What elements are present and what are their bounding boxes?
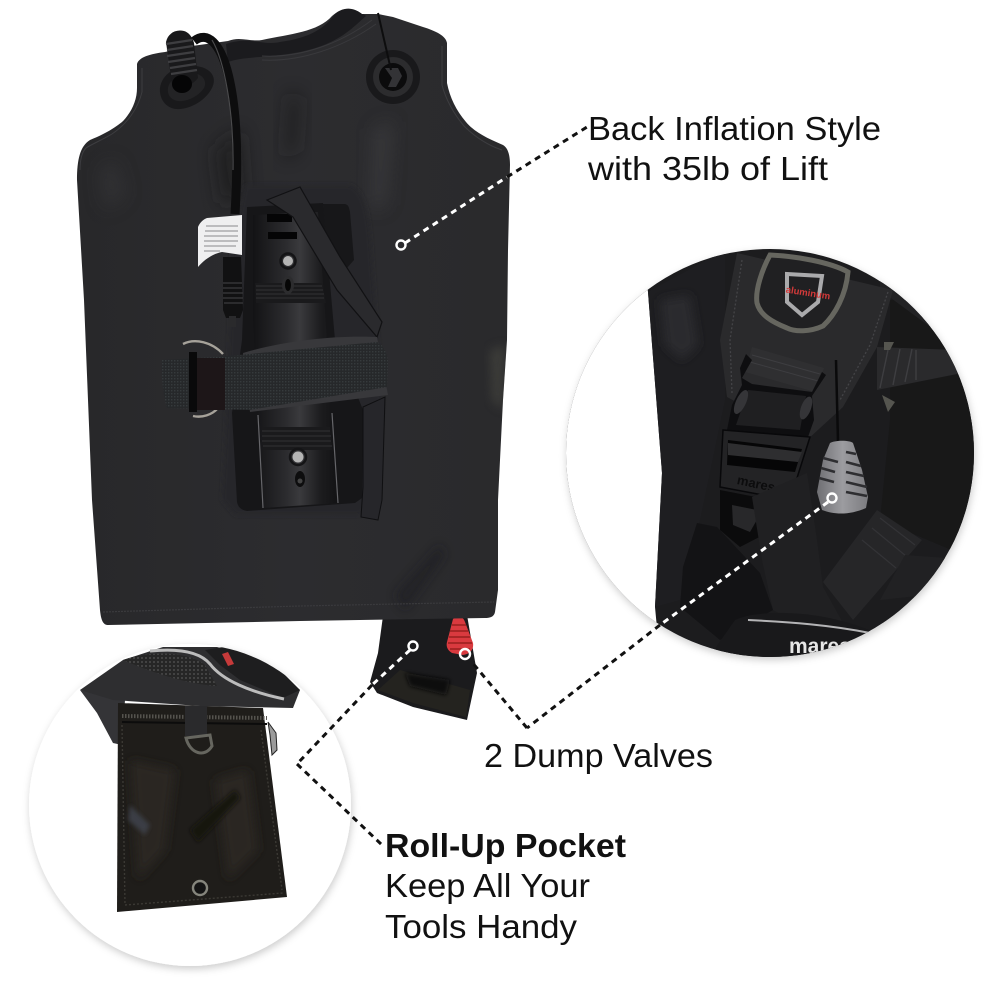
panel: right detail circle: mares (789, 635, 851, 658)
pocket body (117, 703, 287, 912)
silver swoosh (150, 650, 284, 699)
icon: metal buckle ring (183, 341, 223, 417)
diagonal strap (267, 187, 382, 337)
icon: grommet (193, 881, 207, 895)
top flap (80, 647, 300, 708)
text: roll-up pocket callout (385, 827, 626, 945)
icon: side-release buckle (720, 354, 826, 547)
seams (80, 68, 142, 170)
text: back inflation callout: with 35lb of Lift (587, 150, 828, 187)
harness pad (720, 253, 893, 440)
pocket under vest (370, 615, 477, 720)
side strap (877, 347, 962, 390)
care label (198, 215, 242, 267)
icon: D-ring (186, 735, 212, 753)
white backdrop (566, 290, 662, 622)
fold shading (285, 90, 300, 160)
dotted leader: back inflation (396, 127, 587, 250)
panel: left pocket circle (29, 644, 351, 966)
vest side (648, 250, 725, 607)
webbing above buckle (745, 347, 824, 392)
icon: grey pull valve (817, 360, 868, 514)
text: roll-up pocket callout: Keep All Your (385, 867, 590, 904)
icon: left inflator grommet (160, 30, 214, 109)
text: dump valves callout: 2 Dump Valves (484, 737, 713, 774)
vertical strap (752, 477, 798, 538)
plate recess (222, 185, 382, 515)
dotted leader: roll-up pocket (297, 642, 418, 844)
lower chest panel (714, 630, 870, 657)
velcro cam band (162, 337, 388, 417)
icon: aluminium D-ring: aluminum (785, 285, 831, 302)
panel: right detail circle (560, 240, 980, 670)
text: roll-up pocket callout: Roll-Up Pocket (385, 827, 626, 864)
dotted panel (123, 654, 217, 686)
inflator hose (194, 37, 243, 327)
text: back inflation callout: Back Inflation Style (588, 110, 881, 147)
vest side behind pocket (80, 690, 125, 745)
tab strap (185, 706, 207, 736)
icon: aluminium D-ring (757, 255, 848, 331)
text: roll-up pocket callout: Tools Handy (385, 908, 578, 945)
icon: side-release buckle: mares (736, 472, 776, 495)
hanging strap (361, 397, 385, 520)
crossing strap (823, 510, 922, 620)
neck collar (226, 9, 366, 62)
pouch flap (680, 523, 773, 640)
back plate (232, 203, 363, 511)
zipper (122, 716, 267, 718)
vest body (77, 9, 510, 625)
glossy cover (205, 645, 300, 698)
icon: hose connector (223, 257, 243, 318)
icon: red dump valve (447, 617, 473, 655)
dotted leader: dump valves (460, 494, 836, 728)
icon: right dump grommet (366, 13, 420, 104)
text: back inflation callout (587, 110, 881, 187)
icon: zip pull (268, 722, 277, 755)
